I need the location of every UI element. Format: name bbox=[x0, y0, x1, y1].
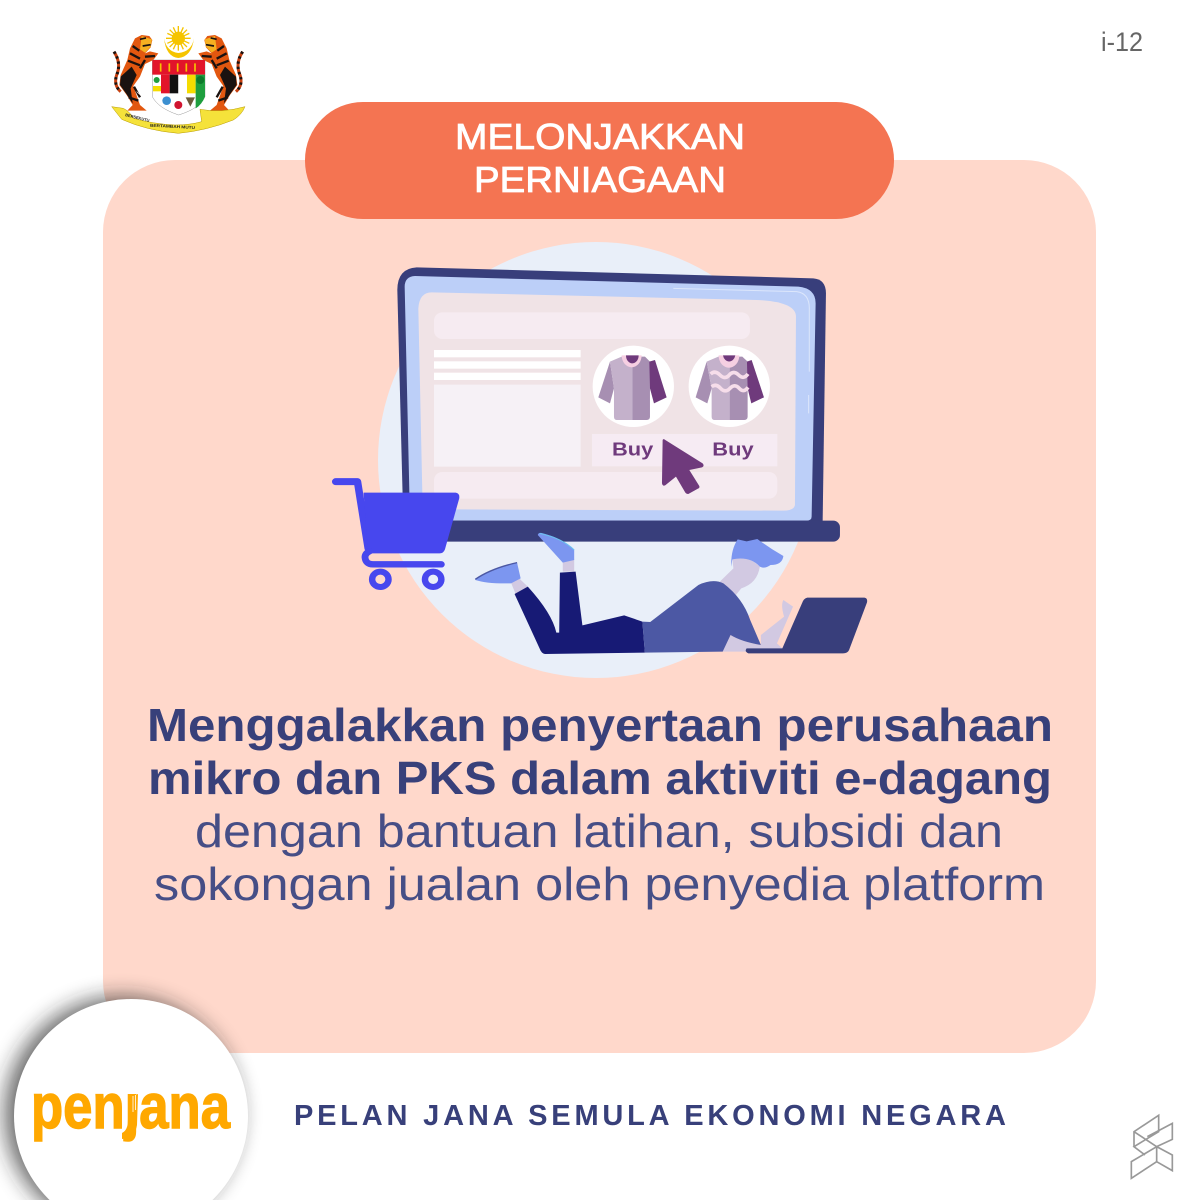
left tiger bbox=[114, 35, 158, 111]
illustration: person, cart and laptop bbox=[336, 482, 867, 654]
crescent and star bbox=[164, 26, 194, 58]
penjana logo badge bbox=[5, 997, 248, 1200]
footer tagline: PELAN JANA SEMULA EKONOMI NEGARA bbox=[294, 1100, 1006, 1132]
shield bbox=[152, 60, 205, 115]
product: plain shirt bbox=[593, 346, 674, 427]
person lying down bbox=[475, 533, 793, 654]
main text block bbox=[147, 699, 1053, 910]
bold statement bbox=[147, 699, 1053, 804]
motto scroll: BERSEKUTU bbox=[125, 112, 150, 123]
buy bar: Buy bbox=[612, 438, 654, 459]
background circle bbox=[378, 242, 814, 678]
icon: publisher logo bbox=[1131, 1115, 1172, 1178]
supporting text: dengan bantuan latihan, subsidi dan bbox=[195, 805, 1003, 857]
penjana wordmark: penjana bbox=[31, 1072, 231, 1142]
heading pill bbox=[305, 102, 894, 219]
code label i-12: i-12 bbox=[1101, 27, 1143, 57]
buy bar bbox=[592, 434, 777, 466]
supporting text: sokongan jualan oleh penyedia platform bbox=[154, 858, 1045, 910]
buy bar: Buy bbox=[712, 438, 754, 459]
icon: cursor arrow bbox=[662, 439, 704, 494]
illustration: desktop screen shop bbox=[397, 267, 840, 542]
right tiger bbox=[198, 35, 243, 111]
heading text: MELONJAKKAN bbox=[455, 116, 745, 157]
product: patterned shirt bbox=[689, 346, 770, 427]
panel: main peach background bbox=[103, 160, 1096, 1053]
motto scroll bbox=[112, 107, 245, 133]
motto scroll: BERTAMBAH MUTU bbox=[150, 123, 195, 130]
heading text: PERNIAGAAN bbox=[474, 159, 726, 200]
bold statement: Menggalakkan penyertaan perusahaan bbox=[147, 699, 1053, 751]
icon: shopping cart bbox=[336, 482, 459, 587]
small laptop bbox=[746, 598, 867, 653]
icon: Malaysian coat of arms bbox=[112, 26, 245, 133]
supporting text bbox=[154, 805, 1045, 910]
bold statement: mikro dan PKS dalam aktiviti e-dagang bbox=[148, 752, 1052, 804]
heading text bbox=[455, 116, 745, 200]
base bar bbox=[430, 521, 840, 542]
